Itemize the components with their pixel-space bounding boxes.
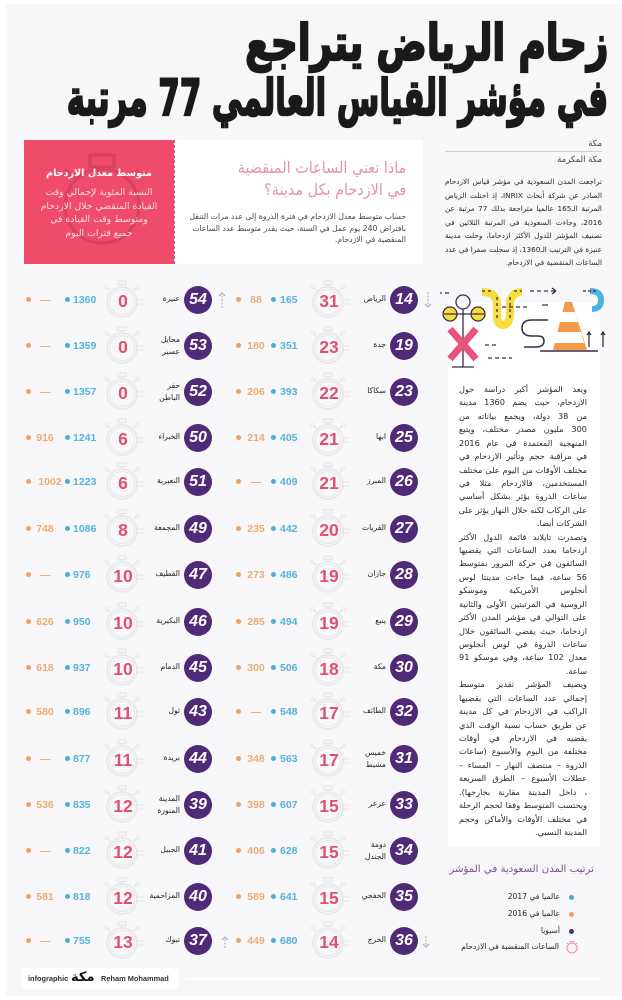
row: Al-Majmaah: 8: [118, 520, 128, 540]
row: Buraydah: —: [40, 753, 50, 765]
row: Al-Mubarraz: المبرز: [367, 476, 386, 485]
row: Khamis Mushait: 31: [395, 750, 413, 767]
row: Muhayil Asir: 0: [118, 337, 128, 357]
row: Jubail: —: [40, 845, 50, 857]
arrow: Tabuk rank up: [222, 936, 228, 948]
row: Buraydah: 11: [114, 750, 132, 770]
explanation text: حساب متوسط معدل الازدحام في فترة الذروة إلى عدد مرات التنقل: [189, 212, 406, 221]
row: Tabuk: 37: [189, 932, 207, 949]
row: Al-Nairyah: 1002: [38, 476, 62, 488]
row: Al-Kharj: 14: [319, 932, 339, 952]
row: Muhayil Asir: [26, 326, 212, 364]
row: Hafar Al-Batin: حفر: [167, 381, 180, 390]
row: Madinah: المنورة: [157, 806, 180, 815]
row: Khamis Mushait: مشيط: [366, 760, 386, 769]
row: Al-Khobar/Al-Khabra: 50: [189, 429, 207, 446]
panel: average congestion rate (pink): [24, 140, 174, 264]
row: Khamis Mushait: 348: [247, 753, 265, 765]
explanation text: المنقضية في الازدحام.: [335, 235, 406, 244]
row: Abha: 21: [319, 429, 339, 449]
row: Abha: [236, 418, 418, 456]
intro text: المرتبة الـ165 عالميا متراجعة بذلك 77 مرتبة عن: [445, 204, 602, 213]
row: Sakaka: 206: [247, 386, 265, 398]
row: Al-Bukayriyah: 10: [113, 613, 133, 633]
row: Al-Mubarraz: [236, 462, 418, 500]
legend item: lost hours: الساعات المنقضية في الازدحام: [461, 942, 559, 951]
row: Jubail: [0, 828, 206, 874]
row: Sakaka: [236, 372, 418, 410]
article text: المدينة النسبي.: [535, 827, 587, 837]
row: Thuwal: 896: [73, 706, 91, 718]
row: Qatif: 10: [113, 566, 133, 586]
panel: what do lost hours mean: [174, 140, 423, 264]
credit box: [22, 968, 178, 989]
row: Jazan: 19: [319, 566, 339, 586]
row: Khamis Mushait: خميس: [365, 748, 386, 757]
article text: الروسية في المرتبتين الأولى والثانية: [459, 599, 587, 609]
article text: 300 مليون مصدر مختلف، ويتبع: [459, 424, 587, 434]
row: Buraydah: 877: [73, 753, 91, 765]
row: Riyadh: 31: [319, 291, 339, 311]
row: Hafar Al-Batin: —: [40, 386, 50, 398]
row: Dammam: 10: [113, 659, 133, 679]
row: Taif: الطائف: [363, 706, 386, 715]
row: Jubail: 822: [73, 845, 91, 857]
row: Unayzah: [26, 280, 212, 318]
row: Thuwal: 11: [114, 703, 132, 723]
row: Qatif: 976: [73, 569, 91, 581]
row: Al-Khobar/Al-Khabra: 6: [118, 429, 128, 449]
row: Al-Nairyah: [26, 462, 212, 500]
legend item: world 2016: عالميا في 2016: [508, 909, 560, 918]
row: Madinah: المدينة: [159, 794, 180, 803]
article text: ويعد المؤشر أكبر دراسة حول: [459, 384, 587, 394]
legend item: lost hours: [461, 941, 578, 954]
row: Al-Bukayriyah: 626: [36, 616, 54, 628]
row: Hafar Al-Batin: 1357: [73, 386, 96, 398]
row: Sakaka: 393: [280, 386, 298, 398]
ranking table: left column: [26, 280, 212, 958]
article text: السائقون في حركة المرور بمتوسط: [459, 558, 587, 568]
title: زحام الرياض يتراجع: [245, 14, 608, 72]
row: Madinah: 12: [113, 796, 133, 816]
row: Qatif: 47: [189, 566, 207, 583]
article text: [458, 384, 587, 838]
article text: ساعة.: [566, 666, 587, 676]
row: Yanbu: [236, 602, 418, 640]
row: Abha: 25: [395, 429, 413, 446]
icon: faded stopwatch: [64, 154, 140, 244]
article text: ساعات الذروة يؤثر بشكل أساسي: [459, 491, 587, 501]
panel heading: في الازدحام بكل مدينة؟: [264, 180, 406, 199]
row: Taif: 32: [395, 703, 413, 720]
row: Al-Muzahimiyah: 40: [189, 888, 207, 905]
row: Arar: 33: [395, 796, 413, 813]
row: Arar: 398: [247, 799, 265, 811]
row: Al-Kharj: 449: [247, 935, 265, 947]
row: Al-Muzahimiyah: 818: [73, 891, 91, 903]
row: Dammam: الدمام: [160, 662, 180, 671]
row: Tabuk: تبوك: [165, 935, 180, 944]
row: Al-Bukayriyah: البكيرية: [156, 616, 180, 625]
row: Al-Muzahimiyah: [0, 874, 206, 920]
row: Al-Bukayriyah: 46: [189, 613, 207, 630]
row: Al-Qurayyat: [236, 510, 418, 546]
article text: مختلف الأوقات من اليوم على مختلف: [459, 465, 587, 475]
row: Jeddah: 180: [247, 340, 265, 352]
row: Sakaka: 23: [395, 383, 413, 400]
row: Hafar Al-Batin: الباطن: [159, 393, 180, 402]
row: Jubail: 12: [113, 842, 133, 862]
row: Sakaka: 22: [319, 383, 339, 403]
arrow: Al-Kharj rank down: [422, 936, 430, 948]
row: Yanbu: 19: [319, 613, 339, 633]
row: Thuwal: [0, 689, 206, 735]
row: Al-Qurayyat: 27: [395, 520, 413, 537]
panel text: [41, 187, 157, 239]
row: Al-Mubarraz: 26: [395, 473, 413, 490]
row: Yanbu: 494: [280, 616, 298, 628]
row: Al-Khobar/Al-Khabra: [26, 418, 212, 456]
panel text: ومتوسط وقت القيادة في: [50, 214, 148, 225]
credit box: Reham Mohammad: [101, 974, 169, 983]
row: Abha: 214: [247, 432, 265, 444]
legend: [448, 864, 594, 954]
article text: ، داخل المدينة مقارنة بخارجها).: [459, 787, 587, 797]
row: Muhayil Asir: —: [40, 340, 50, 352]
row: Al-Majmaah: 1086: [73, 523, 96, 535]
row: Al-Mubarraz: —: [251, 476, 261, 488]
row: Jazan: جازان: [368, 569, 386, 578]
article text: وتصدرت تايلاند قائمة الدول الأكثر: [459, 532, 587, 542]
row: Hafar Al-Batin: [26, 372, 212, 410]
row: Jubail: الجبيل: [160, 845, 180, 854]
article text: المستخدمين، فالازدحام مثلا في: [459, 478, 587, 488]
row: Makkah: 506: [280, 662, 298, 674]
article text: الراكب في الازدحام في كل مدينة: [459, 706, 587, 716]
article text: إجمالي عدد الساعات التي يقضيها: [459, 693, 587, 703]
row: Dumat Al-Jandal: 15: [319, 842, 339, 862]
row: Jazan: 28: [395, 566, 413, 583]
row: Qatif: القطيف: [155, 569, 180, 578]
article text: الازدحام، حيث يضم 1360 مدينة: [459, 397, 587, 407]
intro text: الصادر عن شركة أبحاث INRIX، إذ احتلت الرياض: [445, 190, 602, 200]
row: Jazan: [236, 556, 418, 592]
row: Taif: [236, 692, 418, 730]
row: Khafji: [236, 878, 418, 914]
row: Khafji: 15: [319, 888, 339, 908]
article text: على الركاب لكنه خلال النهار يؤثر على: [459, 505, 587, 515]
row: Makkah: 30: [395, 659, 413, 676]
row: Dumat Al-Jandal: 34: [395, 842, 413, 859]
row: Qatif: [0, 552, 206, 598]
row: Qatif: —: [40, 569, 50, 581]
row: Dammam: 937: [73, 662, 91, 674]
arrow: Riyadh rank down: [424, 292, 432, 308]
row: Al-Qurayyat: 235: [247, 523, 265, 535]
panel heading: [237, 158, 406, 199]
row: Jeddah: 351: [280, 340, 298, 352]
row: Al-Nairyah: 6: [118, 473, 128, 493]
row: Dammam: 618: [36, 662, 54, 674]
legend heading: ترتيب المدن السعودية في المؤشر: [449, 864, 594, 875]
article text: ويحتسب المتوسط وفقا لحجم الرحلة: [459, 800, 587, 810]
row: Khafji: 35: [395, 888, 413, 905]
row: Hafar Al-Batin: 0: [118, 383, 128, 403]
row: Arar: عرعر: [369, 799, 386, 808]
row: Tabuk: 13: [113, 932, 133, 952]
row: Riyadh: [236, 280, 418, 318]
row: Unayzah: 0: [118, 291, 128, 311]
row: Al-Nairyah: 1223: [73, 476, 96, 488]
panel heading: ماذا تعني الساعات المنقضية: [237, 158, 406, 177]
article text: عطلات الأسبوع – الطرق السريعة: [459, 773, 587, 783]
row: Riyadh: 14: [395, 291, 413, 308]
row: Unayzah: 54: [189, 291, 207, 308]
row: Riyadh: 88: [250, 294, 262, 306]
row: Tabuk: 755: [73, 935, 91, 947]
row: Al-Bukayriyah: 950: [73, 616, 91, 628]
explanation text: [189, 212, 406, 244]
row: Taif: 548: [280, 706, 298, 718]
row: Unayzah: —: [40, 294, 50, 306]
row: Dumat Al-Jandal: الجندل: [365, 852, 386, 861]
row: Jeddah: جدة: [373, 340, 386, 349]
row: Makkah: [236, 648, 418, 686]
row: Jeddah: [236, 326, 418, 364]
panel text: النسبة المئوية لإجمالي وقت: [45, 187, 153, 198]
row: Al-Majmaah: [0, 506, 206, 552]
intro text: [445, 177, 602, 267]
row: Khamis Mushait: [236, 740, 418, 776]
article text: معدل 102 ساعة، وفي موسكو 91: [459, 652, 587, 662]
row: Jeddah: 19: [395, 337, 413, 354]
row: Al-Muzahimiyah: المزاحمية: [149, 891, 180, 900]
article text: 56 ساعة، فيما جاءت مدينتا لوس: [459, 572, 587, 582]
row: Khamis Mushait: 563: [280, 753, 298, 765]
row: Al-Nairyah: النعيرية: [157, 476, 180, 485]
row: Unayzah: 1360: [73, 294, 96, 306]
row: Thuwal: ثول: [168, 706, 180, 715]
source: Makkah: مكة: [588, 139, 602, 149]
intro text: 2016، وجاءت السعودية في المرتبة الثلاثين في: [445, 218, 602, 226]
article text: في مراقبة حجم وتأثير الازدحام في: [459, 451, 587, 461]
row: Khafji: 589: [247, 891, 265, 903]
footer divider line: [185, 978, 600, 980]
intro text: عنيزة في الترتيب الـ1360، إذ سجلت صفرا في عدد: [445, 244, 602, 254]
row: Dammam: [0, 645, 206, 691]
row: Yanbu: ينبع: [375, 616, 386, 625]
row: Arar: 15: [319, 796, 339, 816]
row: Yanbu: 285: [247, 616, 265, 628]
article text: ويضيف المؤشر تقدير متوسط: [459, 679, 587, 689]
row: Thuwal: 580: [36, 706, 54, 718]
row: Taif: —: [251, 706, 261, 718]
row: Hafar Al-Batin: 52: [189, 383, 207, 400]
article text: الذروة – منتصف النهار – المساء –: [459, 760, 587, 770]
title: في مؤشر القياس العالمي 77 مرتبة: [67, 69, 608, 127]
article text: مختلفة من اليوم والأسبوع (ساعات: [459, 746, 587, 756]
article text: المنهجية المعتمدة في عام 2016: [459, 438, 587, 448]
article text: من 38 دولة، ويجمع بياناته من: [459, 411, 587, 421]
row: Makkah: مكة: [374, 662, 386, 671]
row: Dumat Al-Jandal: 406: [247, 845, 265, 857]
legend item: world 2017: عالميا في 2017: [508, 892, 560, 901]
row: Buraydah: 44: [189, 750, 207, 767]
row: Al-Majmaah: المجمعة: [154, 523, 180, 532]
intro text: الساعات المنقضية في الازدحام.: [506, 258, 602, 267]
row: Al-Majmaah: 49: [189, 520, 207, 537]
row: Muhayil Asir: عسير: [162, 347, 180, 356]
article text: على التوالي في مؤشر المدن الأكثر: [459, 612, 587, 622]
row: Madinah: 835: [73, 799, 91, 811]
row: Al-Mubarraz: 409: [280, 476, 298, 488]
row: Al-Kharj: [236, 922, 418, 958]
row: Dumat Al-Jandal: [236, 832, 418, 868]
row: Madinah: 39: [189, 796, 207, 813]
ranking table: right column: [236, 280, 418, 958]
row: Madinah: 536: [36, 799, 54, 811]
row: Jazan: 273: [247, 569, 265, 581]
row: Al-Nairyah: 51: [189, 473, 207, 490]
article text: أنجلوس الأمريكية وموسكو: [459, 585, 587, 595]
row: Khafji: الخفجي: [362, 891, 386, 900]
row: Khafji: 641: [280, 891, 298, 903]
row: Al-Bukayriyah: [0, 599, 206, 645]
row: Sakaka: سكاكا: [367, 386, 386, 395]
row: Dumat Al-Jandal: دومة: [371, 840, 386, 849]
row: Al-Muzahimiyah: 12: [113, 888, 133, 908]
panel: article text: [448, 302, 600, 847]
intro text: تراجعت المدن السعودية في مؤشر قياس الازدحام: [445, 177, 602, 186]
legend item: Asia: أسيويا: [541, 926, 560, 935]
panel heading: متوسط معدل الازدحام: [46, 168, 152, 179]
row: Al-Khobar/Al-Khabra: 1241: [73, 432, 96, 444]
source: Makkah: مكة المكرمة: [557, 155, 602, 165]
row: Muhayil Asir: محايل: [161, 335, 180, 344]
row: Arar: [236, 786, 418, 822]
row: Unayzah: عنيزة: [163, 294, 180, 303]
article text: في مختلف الأوقات والأماكن وحجم: [459, 814, 587, 824]
source: Makkah: [445, 139, 602, 165]
row: Al-Muzahimiyah: 581: [36, 891, 54, 903]
arrow: Riyadh rank up: [218, 292, 226, 308]
row: Taif: 17: [319, 703, 339, 723]
row: Al-Khobar/Al-Khabra: الخبراء: [158, 432, 180, 441]
row: Yanbu: 29: [395, 613, 413, 630]
row: Muhayil Asir: 1359: [73, 340, 96, 352]
row: Dammam: 45: [189, 659, 207, 676]
row: Jazan: 486: [280, 569, 298, 581]
row: Muhayil Asir: 53: [189, 337, 207, 354]
row: Al-Qurayyat: 442: [280, 523, 298, 535]
row: Makkah: 18: [319, 659, 339, 679]
row: Buraydah: بريدة: [164, 753, 180, 762]
row: Al-Majmaah: 748: [36, 523, 54, 535]
row: Madinah: [0, 782, 206, 828]
row: Arar: 607: [280, 799, 298, 811]
row: Al-Qurayyat: 20: [319, 520, 339, 540]
row: Al-Qurayyat: القريات: [362, 523, 386, 532]
row: Al-Kharj: الخرج: [368, 935, 386, 944]
row: Al-Mubarraz: 21: [319, 473, 339, 493]
row: Al-Kharj: 680: [280, 935, 298, 947]
article text: ازدحاما بعدد الساعات التي يقضيها: [459, 545, 587, 555]
row: Jubail: 41: [189, 842, 207, 859]
row: Khamis Mushait: 17: [319, 750, 339, 770]
legend item: Asia: [541, 926, 574, 935]
row: Buraydah: [0, 736, 206, 782]
row: Al-Khobar/Al-Khabra: 916: [36, 432, 54, 444]
row: Makkah: 300: [247, 662, 265, 674]
article text: الشركات أيضا.: [537, 518, 587, 528]
row: Dumat Al-Jandal: 628: [280, 845, 298, 857]
article text: ساعات الذروة في لوس أنجلوس: [459, 639, 587, 649]
row: Al-Kharj: 36: [395, 932, 413, 949]
row: Riyadh: الرياض: [364, 294, 386, 303]
intro text: تصنيف المؤشر للدول الأكثر ازدحاما، وحلت مدينة: [445, 231, 602, 240]
article text: ازدحاما، حيث يقضي السائقون خلال: [459, 626, 587, 636]
explanation text: بافتراض 240 يوم عمل في السنة، حيث يقدر متوسط عدد الساعات: [192, 224, 406, 233]
row: Tabuk: —: [40, 935, 50, 947]
panel text: القيادة المنقضي خلال الازدحام: [41, 201, 157, 212]
icon: traffic illustration: [440, 288, 606, 368]
row: Thuwal: 43: [189, 703, 207, 720]
panel text: جميع فترات اليوم: [65, 228, 133, 239]
article text: يقضيه في الازدحام في أوقات: [459, 733, 587, 743]
credit box: مكة: [71, 970, 94, 985]
row: Abha: 405: [280, 432, 298, 444]
row: Jeddah: 23: [319, 337, 339, 357]
row: Riyadh: 165: [280, 294, 298, 306]
title: [67, 14, 608, 128]
credit box: infographic: [28, 974, 68, 983]
row: Abha: ابها: [376, 432, 386, 441]
article text: عن طريق حساب نسبة الوقت الذي: [459, 720, 587, 730]
row: Tabuk: [0, 918, 206, 964]
